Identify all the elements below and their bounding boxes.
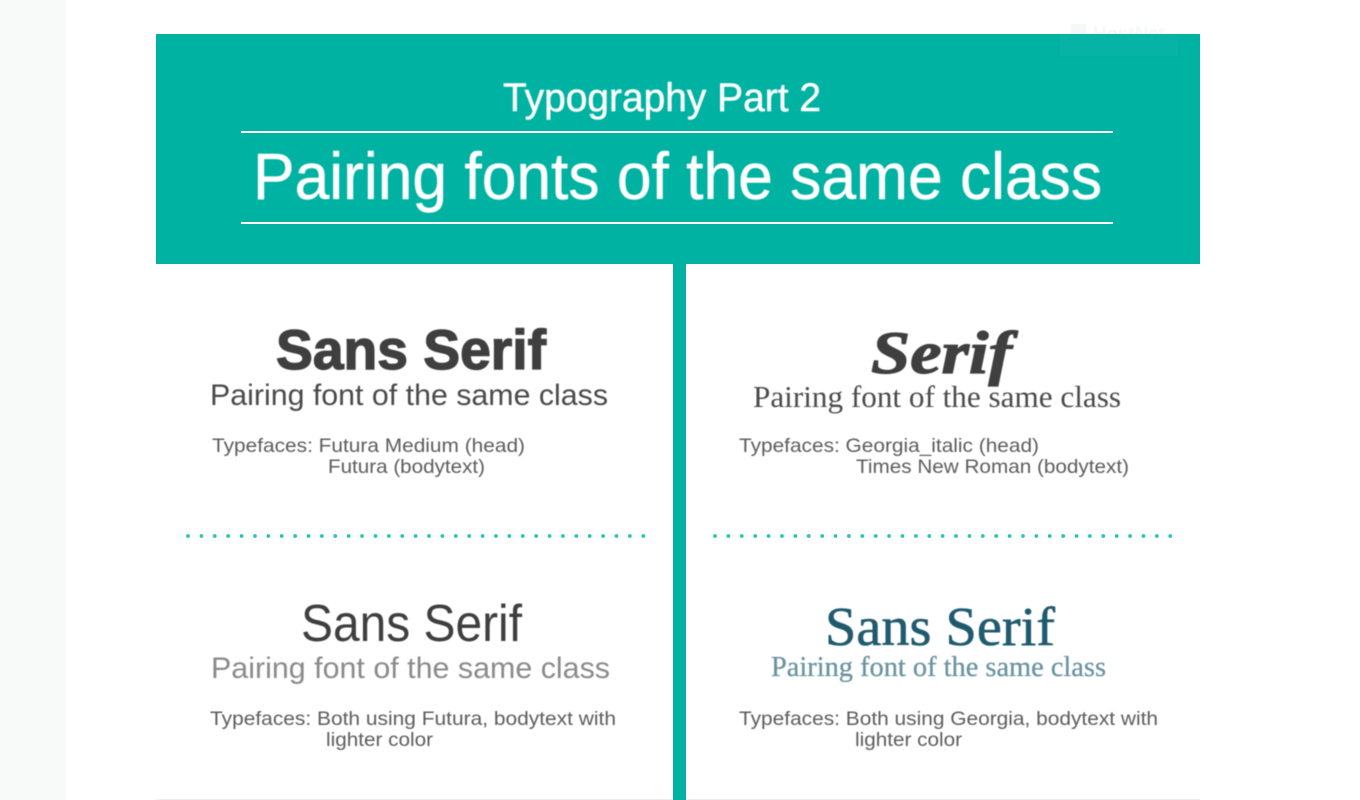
subheading: Pairing font of the same class [210, 379, 608, 412]
heading: bold Sans Serif: Sans Serif [276, 318, 546, 381]
typeface note: Times New Roman (bodytext) [856, 456, 1129, 478]
watermark band [1060, 34, 1178, 56]
panel: bold sans serif pairing [210, 318, 608, 478]
rule above title [241, 131, 1113, 133]
typeface note: Typefaces: Futura Medium (head) [212, 435, 525, 457]
typeface note: lighter color [855, 729, 963, 751]
panel: same serif family lighter body [739, 596, 1158, 751]
vertical divider [673, 264, 686, 800]
typeface note: Typefaces: Both using Futura, bodytext with [210, 708, 616, 730]
heading: regular Sans Serif: Sans Serif [301, 595, 523, 653]
subheading: Pairing font of the same class [753, 379, 1121, 414]
heading: teal Sans Serif in serif face: Sans Serif [825, 596, 1056, 657]
dotted divider right [715, 534, 1173, 538]
dotted divider left [188, 534, 645, 538]
typeface note [212, 435, 525, 478]
subheading lighter: Pairing font of the same class [211, 652, 610, 685]
heading: Typography Part 2: Typography Part 2 [503, 76, 821, 120]
typeface note: Futura (bodytext) [328, 456, 485, 478]
heading: bold italic Serif: Serif [871, 320, 1018, 386]
panel: same sans family lighter body [210, 595, 616, 751]
panel: serif pairing [739, 320, 1129, 478]
typeface note [210, 708, 616, 751]
subheading lighter teal: Pairing font of the same class [771, 652, 1106, 683]
title: Pairing fonts of the same class: Pairing fonts of the same class [253, 139, 1102, 213]
header banner [156, 34, 1200, 264]
typeface note [739, 435, 1129, 478]
typeface note: Typefaces: Georgia_italic (head) [739, 435, 1039, 457]
watermark: HostNet [1093, 24, 1166, 45]
typeface note [739, 708, 1158, 751]
typeface note: lighter color [326, 729, 434, 751]
rule below title [241, 222, 1113, 224]
typeface note: Typefaces: Both using Georgia, bodytext with [739, 708, 1158, 730]
